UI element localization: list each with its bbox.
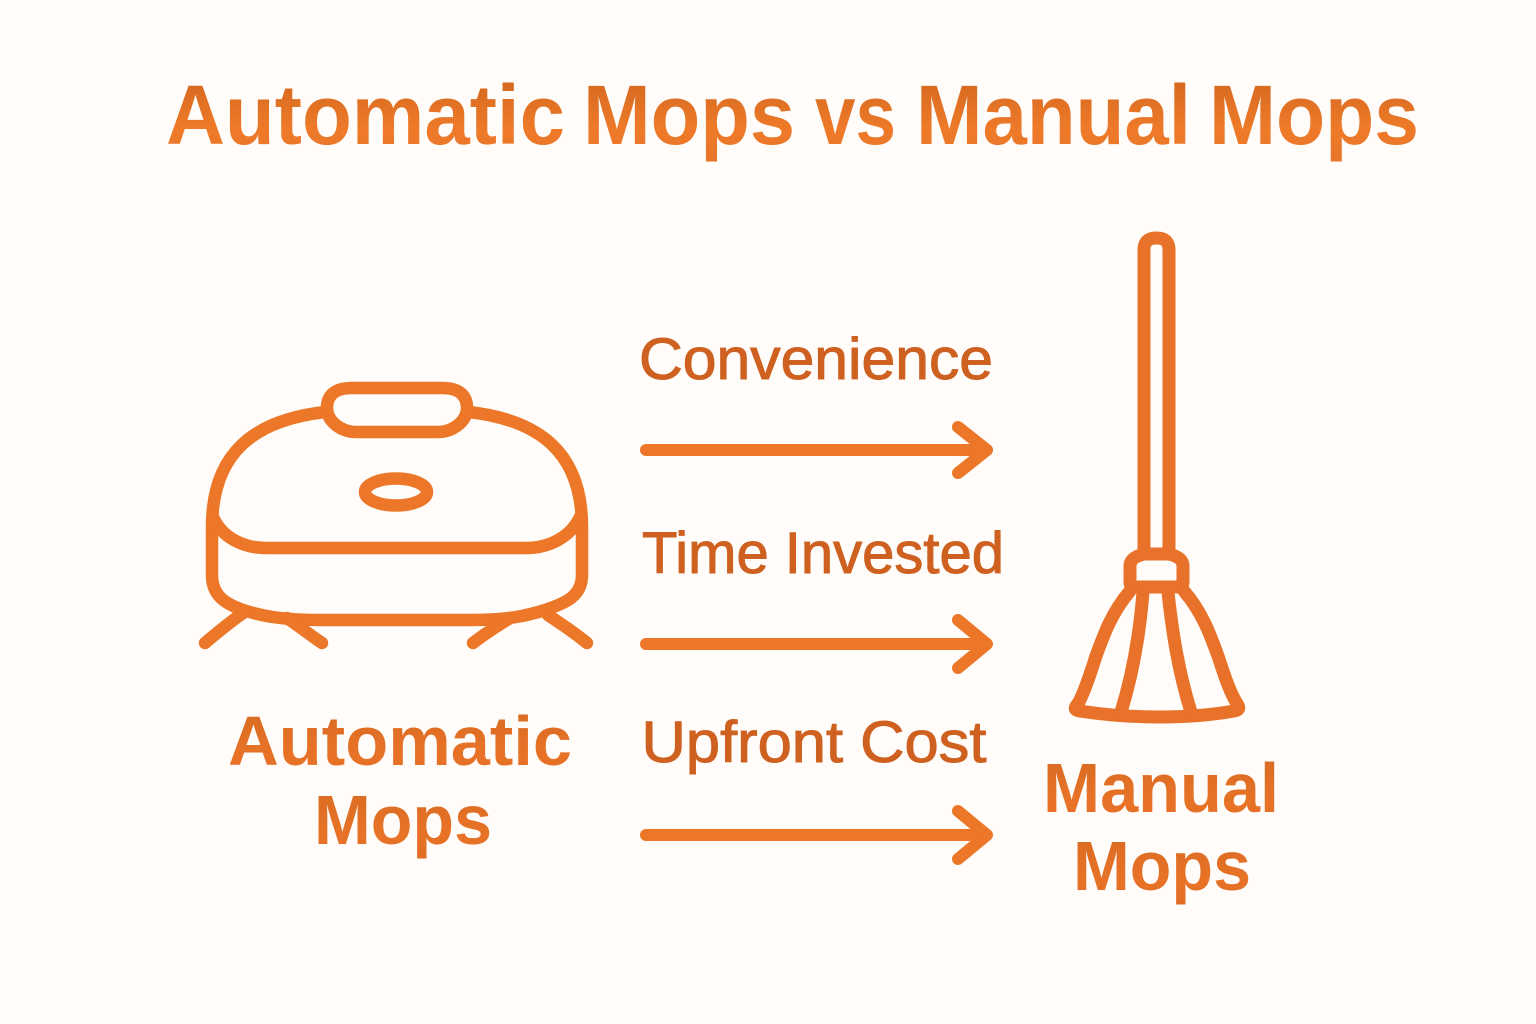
title <box>166 68 1419 162</box>
title: Mops <box>583 68 795 162</box>
title: Mops <box>1209 68 1419 162</box>
title: Manual <box>916 68 1191 162</box>
label: automatic mops: Mops <box>314 781 492 859</box>
label: manual mops <box>1043 749 1279 905</box>
label: automatic mops <box>228 702 572 859</box>
title: Automatic <box>166 68 565 162</box>
label: manual mops: Mops <box>1073 827 1251 905</box>
label: automatic mops: Automatic <box>228 702 572 780</box>
arrow: convenience <box>646 427 987 473</box>
label: manual mops: Manual <box>1043 749 1279 827</box>
title: vs <box>815 68 896 162</box>
icon: robot mop <box>205 388 587 643</box>
label: convenience: Convenience <box>639 327 993 392</box>
label: time invested: Time Invested <box>642 521 1004 586</box>
label: upfront cost: Upfront Cost <box>642 710 986 775</box>
arrow: upfront cost <box>646 811 987 859</box>
icon: manual mop <box>1075 238 1239 717</box>
arrow: time invested <box>646 620 987 668</box>
